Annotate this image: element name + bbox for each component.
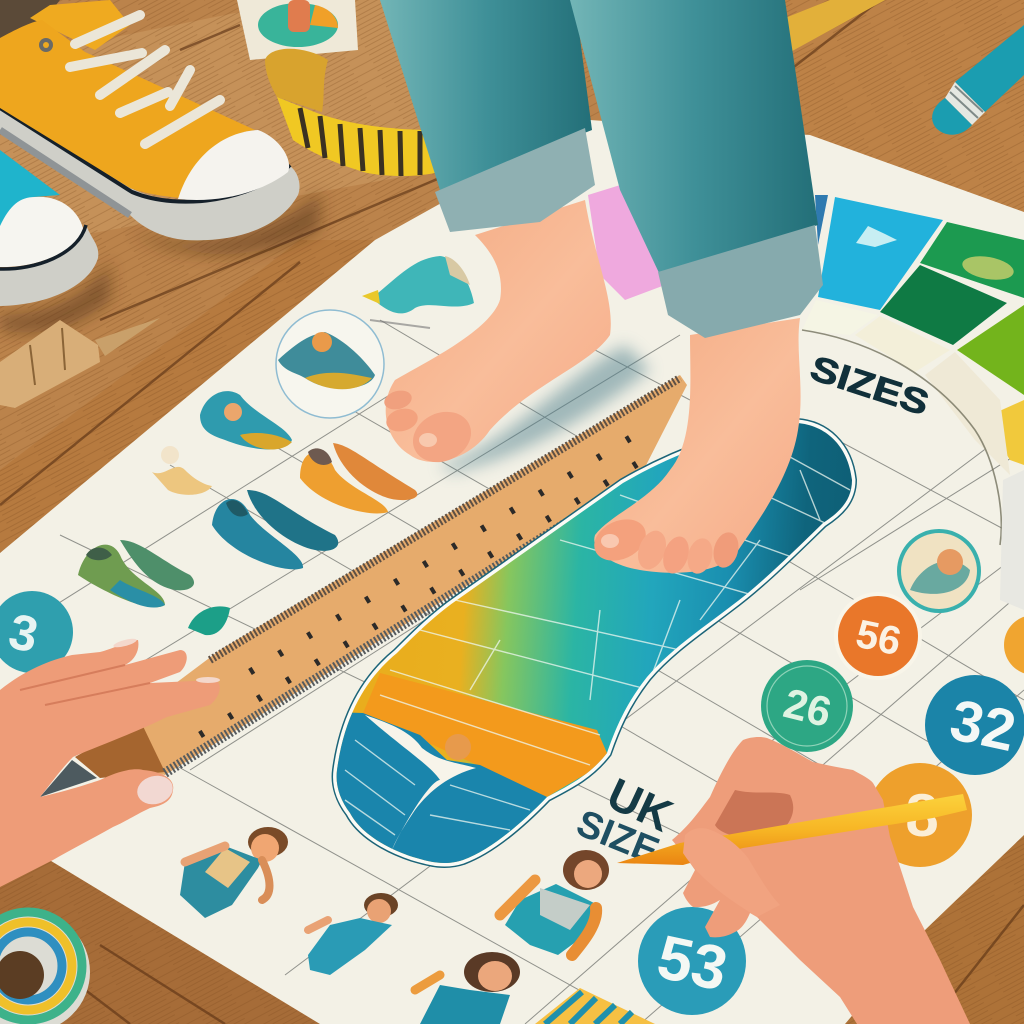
shadows under shoes [0, 190, 320, 332]
shoe and figure icon column [78, 256, 474, 635]
size badge: 56 [834, 592, 922, 680]
size badge: 26 [761, 660, 853, 752]
size badge: 53 [638, 907, 746, 1015]
icon: orange shoes [300, 443, 417, 513]
foot shadow on paper [440, 345, 650, 472]
heading: UK SIZE: UK [600, 768, 681, 842]
paper grid lines [60, 300, 1024, 1024]
yellow tape measure [265, 0, 885, 176]
size badge: 8 amber: 8 [905, 782, 939, 849]
size badge: orange partial right [1004, 615, 1024, 675]
icon: green shoes [78, 540, 194, 607]
blue heel [336, 712, 547, 863]
size badge: 3 left [0, 591, 73, 673]
heading: SIZES: SIZES [806, 349, 934, 423]
icon: teal figure [362, 256, 474, 328]
small chart figure circle [897, 529, 981, 613]
jeans left leg [380, 0, 595, 232]
rainbow size fan top right [588, 182, 1024, 610]
size badge: 32 [925, 675, 1024, 775]
figure: woman at bottom [415, 952, 520, 1024]
photo card [237, 0, 358, 60]
rainbow tape roll [0, 912, 90, 1024]
right hand writing with pencil [617, 737, 970, 1024]
foot outline insole with colour zones [330, 410, 860, 880]
size badge: 3 left: 3 [4, 603, 43, 663]
size badge: 8 amber [868, 763, 972, 867]
icon: wrapped blue and yellow figure [200, 391, 292, 449]
ruler [75, 375, 687, 778]
colour stripes swatch [535, 988, 655, 1024]
pencil [617, 794, 967, 865]
size badge: 56: 56 [852, 612, 905, 664]
figure: woman with brown hair [500, 850, 609, 955]
icon: blue shoes [212, 490, 338, 569]
size badge: 32: 32 [945, 687, 1021, 764]
heading: UK SIZE: SIZE [571, 802, 665, 873]
heading: UK SIZE [571, 768, 681, 873]
size badge: 26: 26 [779, 679, 836, 736]
icon: circled figure [276, 310, 384, 418]
right foot [587, 318, 801, 577]
left hand on ruler [0, 637, 220, 887]
orange band [363, 673, 610, 797]
teal crayon [932, 25, 1024, 135]
cell lines [345, 435, 850, 835]
left foot [382, 200, 611, 471]
wooden block [0, 318, 160, 408]
figure: man in teal shirt [308, 893, 398, 975]
icon: small green shoe [188, 606, 230, 635]
yellow canvas shoe [0, 0, 300, 240]
jeans right leg [570, 0, 823, 338]
icon: faded figure [152, 446, 212, 495]
teal canvas shoe [0, 150, 98, 306]
size badge: 53: 53 [651, 923, 733, 1004]
figure: woman in blue apron [180, 827, 288, 918]
